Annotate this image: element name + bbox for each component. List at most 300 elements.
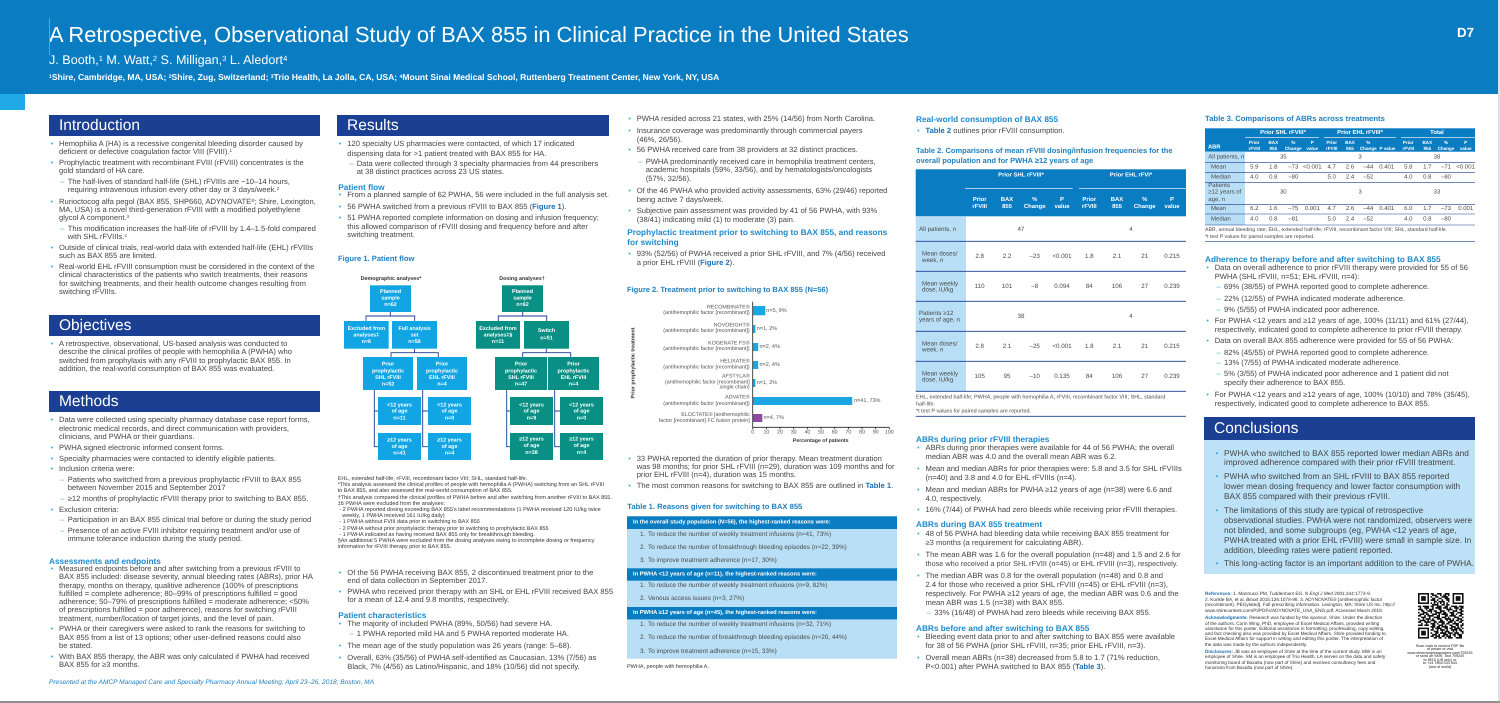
bottom grey band — [0, 701, 1500, 703]
table 3 header: rFVIII — [1326, 146, 1337, 151]
green flow boxes: sample — [513, 296, 532, 302]
heading: figure 1: Figure 1. Patient flow — [338, 254, 414, 263]
table 3 header: 855 — [1346, 146, 1354, 151]
text: consent: PWHA signed electronic informed consent forms. — [59, 443, 224, 452]
row: median: 4.0 — [1250, 173, 1259, 180]
text: prior mean and median: (n=40) and 3.8 and 4.0 for EHL rFVIIIs (n=4). — [926, 473, 1077, 482]
blue flow boxes: analyses‡ — [353, 332, 379, 338]
green flow boxes: <12 years — [569, 402, 594, 408]
text: exclusion b — [68, 527, 300, 543]
heading: results: Results — [347, 117, 399, 134]
blue flow boxes: EHL rFVIII — [429, 375, 455, 381]
x axis tick labels: 30 — [791, 430, 797, 436]
text: table 2 pointer: Table 2 outlines prior rFVIII consumption. — [926, 126, 1065, 135]
title caret mark — [49, 18, 50, 55]
row: median: 4.0 — [1404, 173, 1413, 180]
text: disclosures: Disclosures: JB was an employee of Shire at the time of the current study. MW is an — [1205, 649, 1382, 654]
row: mean 12 and older: 6.0 — [1404, 205, 1413, 212]
heading: objectives — [49, 315, 320, 336]
text: rurioctocog: Rurioctocog alfa pegol (BAX 855, SHP660, ADYNOVATE®; Shire, Lexington, — [59, 197, 316, 206]
table 3 header: value — [1306, 146, 1319, 151]
text: references — [1205, 591, 1395, 613]
table 3: ABR comparisons — [1205, 128, 1476, 242]
text: bleeding event data — [926, 633, 1175, 650]
table 3 header: Prior SHL rFVIII* — [1260, 129, 1307, 136]
section: under 12 years — [627, 568, 897, 602]
text: treatment duration: was 98 months; for prior SHL rFVIII (n=29), duration was 109 months and for — [637, 462, 895, 471]
green flow boxes: Prior — [567, 361, 581, 367]
text: conclusion 3: not blinded, and some subgroups (eg, PWHA <12 years of age, — [1224, 525, 1457, 535]
text: pain — [637, 206, 877, 224]
section: overall population: To improve treatment adherence (n=17, 30%) — [648, 557, 777, 564]
row: mean weekly dose: Mean weekly — [922, 280, 959, 288]
treatment labels: RECOMBINATE® — [707, 305, 750, 311]
section: overall population: In the overall study population (N=56), the highest-ranked reasons were: — [633, 519, 831, 526]
blue flow boxes: n=4 — [445, 450, 454, 456]
row: median: 2.4 — [1346, 173, 1355, 180]
table 3 header: value — [1460, 146, 1472, 151]
blue flow boxes: prophylactic — [426, 368, 458, 374]
green flow boxes: of age — [524, 409, 539, 415]
text: mild and moderate: 1 PWHA reported mild HA and 5 PWHA reported moderate HA. — [357, 629, 569, 638]
x axis tick labels: 60 — [832, 430, 838, 436]
row: mean 12 and older: 1.7 — [1423, 205, 1432, 212]
text: BAX poor adherence: specify their adherence to BAX 855. — [1224, 378, 1345, 387]
text: pharmacies contacted — [347, 139, 574, 158]
blue flow boxes: of age — [392, 444, 407, 450]
row: median 12 and older — [1211, 216, 1452, 223]
row: patients 12 and older: 30 — [1280, 189, 1287, 196]
text: real-world consumption: for switching treatments, and their health outcome changes resulting from — [59, 279, 306, 288]
blue flow boxes: sample — [381, 296, 400, 302]
row: mean weekly dose: 106 — [1112, 283, 1123, 290]
blue flow boxes: Full analysis — [398, 326, 431, 332]
row: median 12 and older: 4.0 — [1404, 216, 1413, 223]
blue flow boxes: n=52 — [382, 381, 394, 387]
text: acknowledgments — [1205, 615, 1386, 647]
text: BAX adherence by age: respectively, indicated good to complete adherence to BAX 855. — [1215, 399, 1430, 408]
heading: adherence: Adherence to therapy before and after switching to BAX 855 — [1205, 254, 1441, 264]
treatment labels: NOVOEIGHT® — [714, 323, 750, 329]
authors: J. Booth,1 M. Watt,2 S. Milligan,3 L. Aledort4 — [49, 53, 287, 67]
table 3 header: P — [1464, 140, 1467, 145]
text: activity: being active 7 days/week. — [637, 195, 724, 204]
blue flow boxes: n=62 — [384, 302, 397, 308]
value labels: n=2, 4% — [760, 344, 780, 350]
heading: methods — [49, 391, 320, 412]
figure 1 footnotes: EHL, extended half-life; rFVIII, recombinant factor VIII; SHL, standard half-life. — [338, 476, 527, 482]
value labels: n=1, 2% — [757, 326, 777, 332]
heading: prophylactic treatment — [627, 228, 887, 247]
table 2 header: Prior — [973, 196, 987, 203]
figure 1 footnotes: ‡6 PWHA were excluded from the analyses: — [338, 501, 445, 507]
text: prescribers — [357, 160, 598, 176]
text: BAX adherence by age — [1215, 390, 1470, 408]
blue flow boxes: ≥12 years — [387, 437, 412, 443]
blue flow boxes: n=4 — [437, 381, 447, 387]
text: ethnicity — [347, 653, 596, 671]
row: all patients — [919, 226, 1133, 233]
text: overall adherence data — [1215, 264, 1468, 281]
green flow boxes: EHL rFVIII — [561, 375, 587, 381]
table 3 header: Prior — [1249, 140, 1260, 145]
row: mean: <0.001 — [1303, 163, 1322, 170]
treatment labels: HELIXATE® — [720, 359, 750, 365]
row: all patients: 38 — [1434, 154, 1441, 161]
row: mean weekly dose: –8 — [1031, 283, 1039, 290]
text: rurioctocog: MA, USA) is a novel third-generation rFVIII with a modified polyethylene — [59, 205, 300, 214]
x axis title: Percentage of patients — [793, 438, 849, 444]
table 3 header: % — [1291, 140, 1295, 145]
row: mean weekly dose: 101 — [1002, 283, 1013, 290]
green flow boxes: Excluded from — [479, 326, 517, 332]
text: endpoints: of prescriptions fulfilled = poor adherence), reasons for switching rFVIII — [59, 605, 297, 614]
text: acknowledgments: the data was made by the authors independently. — [1205, 642, 1307, 647]
text: BAX median ABR: 2.4 for those who received a prior SHL rFVIII (n=45) or EHL rFVIII (n=3), — [926, 580, 1168, 589]
text: endpoints — [59, 565, 313, 623]
table 2 row rules — [916, 241, 1186, 416]
text: pharmacies contacted: dispensing data for >1 patient treated with BAX 855 for HA. — [347, 149, 546, 158]
heading: table 2 — [916, 146, 1173, 165]
text: overall mean ABRs: Overall mean ABRs (n=38) decreased from 5.8 to 1.7 (71% reduction, — [926, 653, 1160, 662]
text: rurioctocog: glycol A component.3 — [59, 213, 129, 222]
cyan corner block — [0, 94, 25, 110]
panel: results continued — [627, 114, 897, 670]
row: mean doses per week, 12 and older: 0.215 — [1164, 343, 1180, 350]
row: mean: 1.8 — [1269, 163, 1278, 170]
text: real-world data limited: Outside of clinical trials, real-world data with extended half-life (EHL) rFVIIIs — [59, 243, 313, 252]
heading: ABRs during prior therapies: ABRs during prior rFVIII therapies — [916, 434, 1049, 444]
text: objectives: describe the clinical profiles of people with hemophilia A (PWHA) who — [59, 347, 292, 356]
row: mean 12 and older: –75 — [1288, 205, 1299, 212]
text: BAX median ABR: respectively. For PWHA ≥12 years of age, the median ABR was 0.6 and the — [926, 589, 1179, 598]
text: conclusion 3: PWHA treated with a prior EHL rFVIII) were small in sample size. In — [1224, 535, 1471, 545]
text: inclusion a — [68, 476, 301, 492]
green flow boxes: n=4 — [577, 450, 586, 456]
section: 12 years and older — [627, 607, 897, 655]
text: BAX adherence by age: For PWHA <12 years and ≥12 years of age, 100% (10/10) and 78% (35/45), — [1215, 390, 1470, 399]
text: ranking reasons: BAX 855 from a list of 13 options; other user-defined reasons could also — [59, 633, 301, 642]
row: median: –80 — [1288, 173, 1299, 180]
value labels: n=5, 9% — [766, 308, 787, 314]
row: patients 12 and older: 33 — [1434, 189, 1441, 196]
text: QR caption: of poster or visit — [1427, 647, 1453, 651]
green flow boxes: n=47 — [515, 381, 527, 387]
affiliations: 1Shire, Cambridge, MA, USA; 2Shire, Zug, Switzerland; 3Trio Health, La Jolla, CA, USA; 4Mount Sinai Medical School, Ruttenberg Treatment Center, New York, NY, USA — [49, 72, 719, 82]
row: mean weekly dose: 84 — [1086, 283, 1093, 290]
text: conclusion 3: The limitations of this study are typical of retrospective — [1224, 505, 1423, 515]
table 2 footnotes: *t test P values for paired samples are reported. — [916, 409, 1032, 415]
table 2 header: value — [1054, 203, 1070, 210]
row: mean 12 and older: 4.7 — [1328, 205, 1337, 212]
blue flow boxes: of age — [442, 409, 457, 415]
table 3 header: Prior EHL rFVIII* — [1337, 129, 1384, 136]
text: QR caption: Scan code to receive PDF file — [1416, 644, 1464, 648]
text: providers: 56 PWHA received care from 38 providers at 32 distinct practices. — [637, 145, 858, 154]
row: all patients: 3 — [1358, 154, 1362, 161]
green flow boxes: n=4 — [569, 381, 578, 387]
green flow boxes: prophylactic — [557, 368, 590, 374]
text: care settings: PWHA predominantly received care in hemophilia treatment centers, — [646, 157, 876, 166]
row: patients 12 and older: years of age, n — [919, 316, 960, 324]
row: mean weekly dose, 12 and older: 95 — [1004, 373, 1011, 380]
row: median 12 and older: 0.8 — [1269, 216, 1278, 223]
section: under 12 years: Venous access issues (n=3, 27%) — [648, 595, 744, 602]
text: prior ABR availability — [926, 444, 1174, 462]
row: mean doses per week, 12 and older: Mean doses/ — [922, 340, 958, 348]
text: endpoints: treatment, number/location of target joints, and the level of pain. — [59, 614, 273, 623]
row: mean: –44 — [1363, 163, 1374, 170]
text: inclusion b: ≥12 months of prophylactic rFVIII therapy prior to switching to BAX 855. — [68, 494, 308, 503]
text: references: 2. Konkle BA, et al. Blood 2015;126:1078-86. 3. ADYNOVATE® [antihemophilic factor — [1205, 597, 1382, 602]
figure 2: bar chart — [630, 302, 894, 444]
text: conclusion 2: lower mean dosing frequency and lower factor consumption with — [1224, 481, 1460, 491]
text: ranking reasons — [59, 625, 305, 651]
section: under 12 years: To reduce the number of weekly treatment infusions (n=9, 82%) — [648, 582, 828, 589]
row: mean doses per week, 12 and older: 2.1 — [1113, 343, 1122, 350]
table 3 header: ABR — [1208, 144, 1221, 150]
blue flow boxes: n=56 — [408, 339, 421, 345]
text: QR caption: to 8610 (US only) or — [1424, 658, 1456, 662]
section: under 12 years: 1. — [640, 582, 646, 589]
row: mean weekly dose: 0.239 — [1164, 283, 1180, 290]
blue flow boxes: n=0 — [445, 415, 454, 421]
text: data sources: electronic medical records, and direct communication with providers, — [59, 424, 289, 433]
row: mean 12 and older — [1211, 205, 1474, 212]
value labels — [757, 308, 881, 421]
text: endpoints: Measured endpoints before and after switching from a previous rFVIII to — [59, 564, 300, 573]
text: prior mean and median — [926, 465, 1182, 482]
table 2 header: % — [1142, 196, 1148, 203]
green flow boxes: <12 years — [519, 402, 544, 408]
green flow boxes: Planned — [512, 289, 533, 295]
treatment labels: (antihemophilic factor [recombinant] — [665, 379, 750, 385]
heading: conclusions — [1204, 417, 1475, 440]
text: zero bleeds prior: 16% (7/44) of PWHA had zero bleeds while receiving prior rFVIII therapies. — [926, 505, 1177, 514]
text: prior SHL: a prior EHL rFVIII (Figure 2). — [637, 258, 734, 266]
row: mean: 2.6 — [1346, 163, 1355, 170]
text: exclusion: Exclusion criteria: — [59, 505, 119, 514]
text: overall adherence data: PWHA (SHL rFVIII, n=51; EHL rFVIII, n=4): — [1215, 272, 1359, 280]
row: all patients: 4 — [1129, 226, 1133, 233]
table 2 header: Prior EHL rFVI* — [1110, 172, 1153, 179]
text: QR caption: (rest of world) — [1429, 665, 1451, 669]
row: median 12 and older: –80 — [1441, 216, 1452, 223]
text: BAX bleeding data: ≥3 months (a requirement for calculating ABR). — [926, 538, 1083, 547]
green flow boxes: n=38 — [525, 450, 538, 456]
blue flow boxes: Prior — [436, 361, 449, 367]
text: pharmacies contacted: 120 specialty US pharmacies were contacted, of which 17 indicated — [347, 139, 574, 148]
row: mean weekly dose, 12 and older: Mean weekly — [922, 370, 959, 378]
x axis tick labels: 80 — [859, 430, 865, 436]
row: mean doses per week, 12 and older: 2.1 — [1003, 343, 1012, 350]
text: endpoints: adherence; 50–79% of prescriptions fulfilled = moderate adherence; <50% — [59, 597, 309, 606]
value labels: n=41, 73% — [854, 398, 881, 404]
text: ABR calculation — [59, 653, 309, 670]
connectors — [366, 312, 571, 447]
text: acknowledgments: Excel Medical Affairs for support in writing and editing this poster. The interpretation of — [1205, 636, 1383, 641]
text: acknowledgments: of the authors, Corin Wing, PhD, employee of Excel Medical Affairs, provided writing — [1205, 621, 1379, 626]
row: mean doses per week: –23 — [1030, 253, 1040, 260]
heading: patient flow: Patient flow — [338, 182, 385, 192]
section: overall population: 1. — [640, 531, 646, 538]
row: mean doses per week, 12 and older: week, n — [921, 346, 944, 354]
section: 12 years and older: In PWHA ≥12 years of age (n=45), the highest-ranked reasons were: — [633, 609, 817, 616]
text: states: PWHA resided across 21 states, with 25% (14/56) from North Carolina. — [637, 114, 875, 123]
row: median 12 and older: Median — [1211, 216, 1231, 223]
row: mean 12 and older: 2.6 — [1346, 205, 1355, 212]
heading: table 2: Table 2. Comparisons of mean rFVIII dosing/infusion frequencies for the — [916, 146, 1173, 155]
blue flow boxes: Excluded from — [348, 326, 385, 332]
panel: results — [337, 115, 613, 671]
figure 1 footnotes: *This analysis assessed the clinical profiles of people with hemophilia A (PWHA) switching from an SHL rFVIII — [338, 482, 604, 488]
table 2 header: P — [1060, 196, 1064, 203]
row: mean 12 and older: 0.001 — [1458, 205, 1474, 212]
row: mean doses per week — [921, 250, 1180, 264]
row: mean weekly dose, 12 and older: 105 — [975, 373, 985, 380]
row: mean 12 and older: –44 — [1363, 205, 1374, 212]
text: care settings — [646, 158, 876, 183]
text: exclusion b: immune tolerance induction during the study period. — [68, 534, 242, 543]
right edge strip — [1498, 0, 1500, 703]
text: good adherence: 69% (38/55) of PWHA reported good to complete adherence. — [1224, 282, 1429, 291]
text: references: (recombinant), PEGylated]. Full prescribing information. Lexington, MA: Shire US Inc. http:// — [1205, 602, 1395, 607]
treatment labels: KOGENATE FS® — [708, 341, 750, 347]
green flow boxes: analyses‡§ — [484, 332, 512, 338]
row: patients 12 and older: 4 — [1129, 313, 1133, 320]
figure 1 footnotes: †This analysis compared the clinical profiles of PWHA before and after switching from another rFVIII to BAX 855. — [338, 494, 612, 500]
text: real-world consumption: switching rFVIIIs. — [59, 287, 117, 296]
text: prescribers: at 38 distinct practices across 23 US states. — [357, 167, 504, 176]
heading: patient characteristics: Patient characteristics — [338, 610, 426, 620]
text: conclusion 1: improved adherence compared with their prior rFVIII treatment. — [1224, 457, 1456, 467]
text: ABR calculation: BAX 855 for ≥3 months. — [59, 660, 140, 669]
text: BAX median ABR — [926, 571, 1179, 607]
table 2: dosing comparisons — [916, 169, 1186, 417]
text: reasons pointer: The most common reasons for switching to BAX 855 are outlined in Table 1. — [637, 481, 893, 490]
text: hemophilia definition: Hemophilia A (HA) is a recessive congenital bleeding disorder caused by — [59, 139, 303, 148]
heading: results — [337, 115, 609, 136]
text: discontinued — [347, 569, 593, 585]
section: 12 years and older: 1. — [640, 621, 646, 628]
text: moderate adherence: 22% (12/55) of PWHA indicated moderate adherence. — [1224, 294, 1405, 303]
text: pain: Subjective pain assessment was provided by 41 of 56 PWHA, with 93% — [637, 206, 877, 215]
section: 12 years and older: To reduce the number of breakthrough bleeding episodes (n=20, 44%) — [648, 634, 847, 641]
text: activity: Of the 46 PWHA who provided activity assessments, 63% (29/46) reported — [637, 186, 887, 195]
text: acknowledgments: assistance for this poster. Editorial assistance in formatting, proofreading, copy editing, — [1205, 626, 1385, 631]
heading: table 1: Table 1. Reasons given for switching to BAX 855 — [627, 502, 802, 511]
text: inclusion a: between November 2015 and September 2017 — [68, 483, 226, 492]
text: modification — [68, 225, 316, 241]
row: mean weekly dose, 12 and older: 0.239 — [1164, 373, 1180, 380]
row: mean doses per week: <0.001 — [1052, 253, 1072, 260]
row: mean doses per week: 21 — [1141, 253, 1149, 260]
value labels: n=4, 7% — [764, 415, 784, 421]
section: overall population — [627, 516, 897, 564]
table 2 header: rFVIII — [1082, 203, 1097, 210]
text: hemophilia definition — [59, 140, 303, 156]
table 3 footnotes: *t test P values for paired samples are reported. — [1205, 234, 1315, 240]
text: data sources — [59, 416, 310, 442]
text: conclusion 3 — [1224, 505, 1472, 555]
green flow boxes: of age — [574, 409, 589, 415]
row: mean weekly dose, 12 and older: –10 — [1030, 373, 1040, 380]
text: real-world data limited — [59, 244, 313, 260]
x axis tick labels: 100 — [885, 430, 894, 436]
row: patients 12 and older: 38 — [1018, 313, 1025, 320]
text: prophylactic treatment: gold standard of HA care. — [59, 166, 145, 175]
poster number: D7 — [1457, 25, 1474, 40]
heading: assessments: Assessments and endpoints — [49, 556, 161, 566]
row: median: 0.8 — [1269, 173, 1278, 180]
blue flow boxes — [344, 285, 471, 460]
table 3 header — [1208, 129, 1475, 151]
text: prior ABR 12 and older: Mean and median ABRs for PWHA ≥12 years of age (n=38) were 6.6 and — [926, 485, 1172, 494]
text: hemophilia definition: deficient or defective coagulation factor VIII (FVIII).1 — [59, 147, 232, 156]
row: median 12 and older: 0.8 — [1423, 216, 1432, 223]
text: prior ABR availability: median ABR was 4.0 and the overall mean ABR was 6.2. — [926, 452, 1117, 461]
green flow boxes: n=0 — [577, 415, 586, 421]
text: treatment duration — [637, 455, 895, 479]
text: endpoints: fulfilled = complete adherence; 80–99% of prescriptions fulfilled = good — [59, 589, 297, 598]
bars — [753, 306, 852, 422]
heading: ABRs during BAX 855: ABRs during BAX 855 treatment — [916, 520, 1042, 528]
row: mean 12 and older: 0.401 — [1379, 205, 1395, 212]
row: mean doses per week: 2.1 — [1113, 253, 1122, 260]
row: median 12 and older: –52 — [1363, 216, 1374, 223]
row: mean doses per week, 12 and older: –25 — [1030, 343, 1040, 350]
row: mean doses per week: 2.2 — [1003, 253, 1012, 260]
row: median: –52 — [1363, 173, 1374, 180]
x axis tick labels: 0 — [751, 430, 754, 436]
row: mean: –73 — [1288, 163, 1299, 170]
table 2 header: BAX — [1111, 196, 1123, 203]
text: poor adherence: 9% (5/55) of PWHA indicated poor adherence. — [1224, 305, 1380, 314]
row: mean: 5.8 — [1404, 163, 1413, 170]
row: median 12 and older: –81 — [1288, 216, 1299, 223]
text: exclusion a: Participation in an BAX 855 clinical trial before or during the study period — [68, 515, 311, 524]
text: BAX good adherence: 82% (45/55) of PWHA reported good to complete adherence. — [1224, 348, 1429, 357]
table 2 header: P — [1170, 196, 1174, 203]
text: objectives — [59, 340, 292, 373]
text: ethnicity: Overall, 63% (35/56) of PWHA self-identified as Caucasian, 13% (7/56) as — [347, 653, 596, 662]
row: median 12 and older: 4.0 — [1250, 216, 1259, 223]
heading: ABRs before and after: ABRs before and after switching to BAX 855 — [916, 624, 1089, 632]
green flow boxes: ≥12 years — [569, 436, 594, 442]
treatment labels: single chain) — [720, 385, 750, 391]
x axis tick labels: 20 — [777, 430, 783, 436]
treatment labels: (antihemophilic factor [recombinant]) — [663, 328, 750, 334]
table 3 header: BAX — [1268, 140, 1279, 145]
text: adherence by age — [1215, 317, 1469, 335]
text: prior ABR 12 and older: 4.0, respectively. — [926, 494, 982, 503]
heading: prophylactic treatment: Prophylactic treatment prior to switching to BAX 855, and reasons — [627, 228, 887, 237]
footer: meeting note: Presented at the AMCP Managed Care and Specialty Pharmacy Annual Meeting; April 23–26, 2018; Boston, MA — [49, 679, 374, 686]
green flow boxes: ≥12 years — [519, 436, 544, 442]
row: median: 5.0 — [1328, 173, 1337, 180]
text: BAX bleeding data — [926, 529, 1169, 547]
row: patients 12 and older: Patients — [1208, 182, 1230, 189]
treatment labels: AFSTYLA® — [722, 374, 750, 380]
x axis tick labels: 10 — [763, 430, 769, 436]
text: bleeding event data: Bleeding event data prior to and after switching to BAX 855 were available — [926, 632, 1175, 641]
row: all patients: 35 — [1280, 154, 1287, 161]
column label: demographic analyses: Demographic analyses* — [361, 276, 422, 282]
text: complete information: switching treatment. — [347, 230, 415, 239]
text: ranking reasons: PWHA or their caregivers were asked to rank the reasons for switching to — [59, 624, 305, 633]
blue flow boxes: ≥12 years — [437, 437, 462, 443]
icon: QR code — [1418, 593, 1464, 639]
